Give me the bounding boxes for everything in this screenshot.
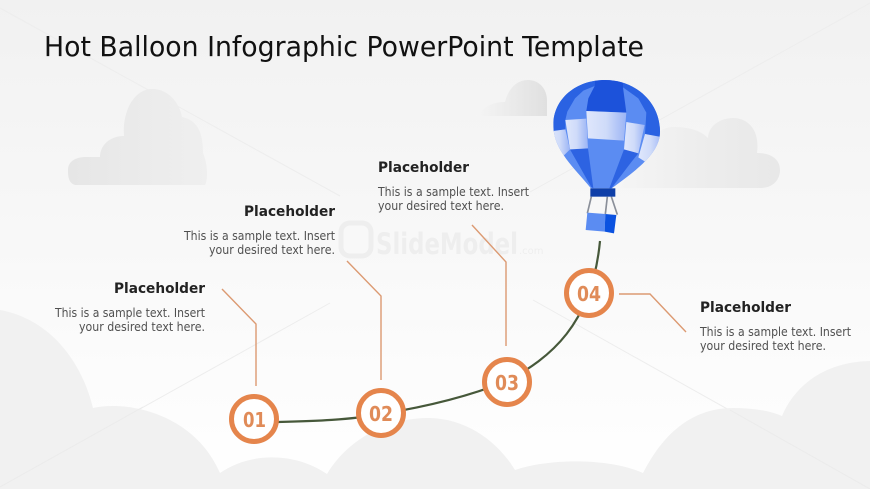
text block 01: your desired text here. — [79, 319, 205, 334]
text block 04: Placeholder — [700, 300, 792, 316]
balloon band — [590, 188, 615, 197]
icon: hot air balloon — [550, 77, 663, 233]
marker 03: 03 — [495, 371, 519, 395]
marker 04 — [566, 270, 612, 316]
text block 03: your desired text here. — [378, 198, 504, 213]
text block 04: your desired text here. — [700, 338, 826, 353]
text block 02: This is a sample text. Insert — [183, 228, 335, 243]
marker 03 — [484, 360, 530, 404]
text block 03: Placeholder — [378, 160, 470, 176]
text block 03: This is a sample text. Insert — [377, 184, 529, 199]
marker 02 — [358, 390, 404, 436]
title: Hot Balloon Infographic PowerPoint Template — [44, 31, 644, 63]
cloud: small top — [476, 80, 547, 116]
marker 04: 04 — [577, 282, 601, 306]
watermark: .com — [519, 246, 544, 257]
flight path — [278, 241, 600, 422]
cloud: top left — [68, 89, 207, 185]
text block 02 — [183, 204, 336, 257]
leader lines — [222, 225, 686, 386]
text block 01: Placeholder — [114, 281, 206, 297]
balloon ropes — [587, 197, 617, 215]
text block 02: Placeholder — [244, 204, 336, 220]
bottom clouds — [0, 310, 870, 489]
text block 01 — [54, 281, 206, 334]
text block 01: This is a sample text. Insert — [54, 305, 205, 320]
text block 04: This is a sample text. Insert — [699, 324, 851, 339]
cloud: right — [620, 118, 780, 188]
balloon basket — [586, 213, 616, 233]
text block 03 — [377, 160, 529, 213]
marker 02: 02 — [369, 402, 393, 426]
balloon envelope — [553, 80, 660, 188]
marker 01: 01 — [243, 408, 266, 432]
text block 02: your desired text here. — [209, 242, 335, 257]
watermark: SlideModel — [376, 227, 518, 261]
marker 01 — [232, 396, 276, 442]
text block 04 — [699, 300, 851, 353]
